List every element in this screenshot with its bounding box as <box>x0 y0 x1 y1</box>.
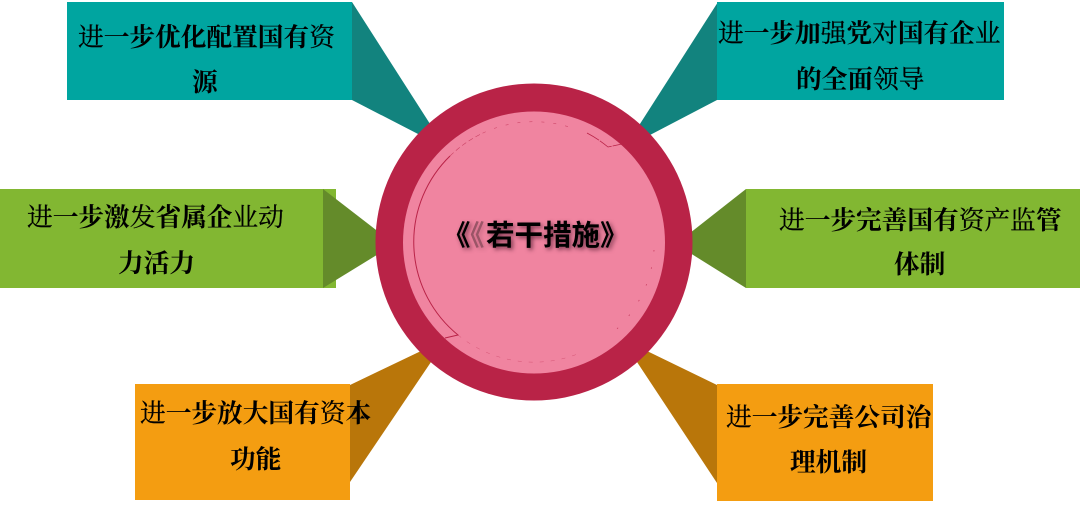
box: middle right <box>746 189 1080 288</box>
text: top left: 源 <box>192 68 220 97</box>
outer ring <box>376 84 692 400</box>
panel: improve state asset supervision <box>690 189 1080 288</box>
thin broken arc inside disc <box>414 122 654 362</box>
box: top right <box>717 2 1004 100</box>
text: middle right: 进一步完善国有资产监管 <box>779 206 1062 235</box>
central title: 《 <box>456 220 485 252</box>
connector wedge: top right <box>638 2 718 135</box>
text: bottom right: 理机制 <box>790 448 867 477</box>
connector wedge: top left <box>352 2 432 135</box>
box: bottom left <box>135 384 350 500</box>
text: middle right: 体制 <box>894 250 945 279</box>
panel: strengthen party leadership <box>638 2 1004 135</box>
connector wedge: middle left <box>323 189 380 288</box>
central circle <box>376 84 692 400</box>
box: middle left <box>0 189 336 288</box>
text: bottom right: 进一步完善公司治 <box>726 403 932 432</box>
panel: stimulate provincial enterprise vitality <box>0 189 380 288</box>
inner disc <box>403 112 665 374</box>
box: top left <box>67 2 352 100</box>
text: bottom left: 进一步放大国有资本 <box>140 399 371 428</box>
box: bottom right <box>717 384 933 501</box>
text: top right: 的全面领导 <box>796 65 924 94</box>
text: top right: 进一步加强党对国有企业 <box>718 19 1001 48</box>
panel: expand state capital function <box>135 351 431 500</box>
central title: 《 <box>442 220 471 252</box>
text: bottom left: 功能 <box>230 445 281 474</box>
connector wedge: bottom right <box>637 351 717 483</box>
connector wedge: middle right <box>690 189 746 288</box>
text: top left: 进一步优化配置国有资 <box>78 23 335 52</box>
connector wedge: bottom left <box>350 351 431 482</box>
panel: optimise state capital allocation <box>67 2 432 135</box>
panel: improve corporate governance <box>637 351 934 501</box>
text: middle left: 进一步激发省属企业动 <box>27 203 284 232</box>
text: middle left: 力活力 <box>118 249 195 278</box>
central title: 若干措施》 <box>486 220 629 252</box>
